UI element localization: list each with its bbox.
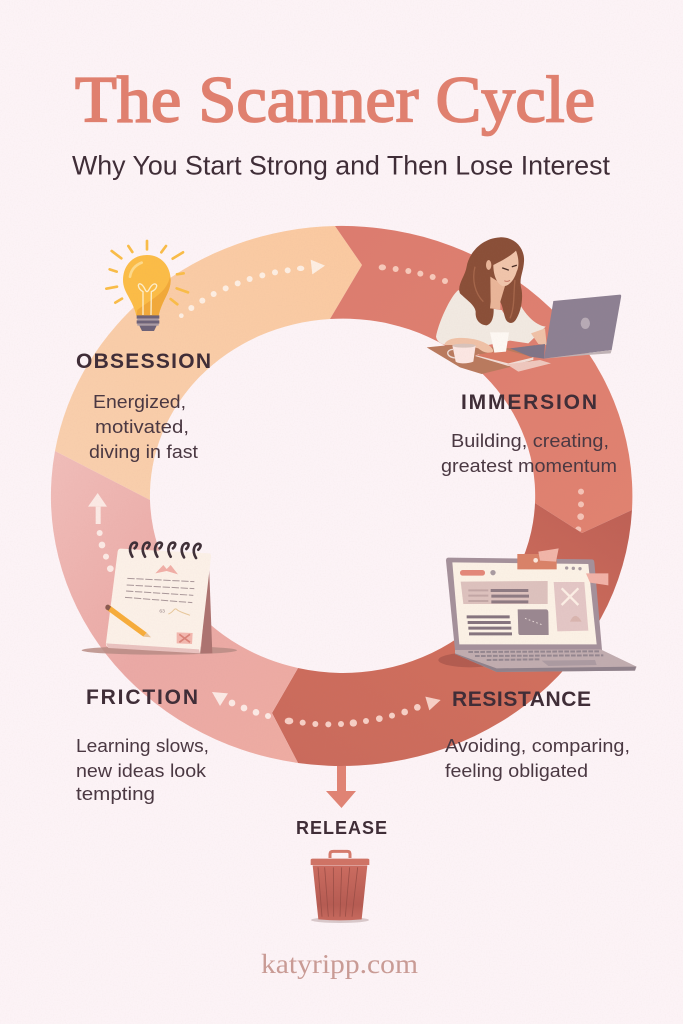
ring segment: friction [51, 451, 298, 763]
icon: desk calendar with pencil [82, 543, 237, 655]
calendar stand [201, 555, 212, 653]
description: obsession: Energized, [93, 391, 186, 412]
white cup [490, 332, 509, 353]
spiral rings [130, 543, 201, 558]
heading: obsession: OBSESSION [76, 350, 211, 373]
icon: woman working at laptop [427, 237, 551, 374]
calendar page [106, 549, 211, 653]
icon: light bulb [106, 241, 188, 331]
website credit: katyripp.com [261, 949, 418, 979]
dotted arrow: immersion to resistance [567, 489, 584, 557]
dotted arrow: obsession to immersion [179, 260, 325, 318]
description: friction [76, 735, 209, 804]
trash body [313, 865, 367, 920]
hair highlights [474, 267, 515, 318]
description: friction: new ideas look [76, 760, 207, 781]
subtitle: Why You Start Strong and Then Lose Interest [72, 150, 610, 180]
cross box [177, 632, 193, 644]
blouse [436, 290, 546, 345]
ear [486, 260, 491, 270]
description: immersion [441, 430, 617, 476]
laptop shadow [438, 653, 502, 667]
desk [427, 345, 535, 374]
description: friction: Learning slows, [76, 735, 209, 756]
dotted arrow: friction to obsession [88, 493, 114, 572]
arrow: down to release [326, 766, 356, 808]
heading: resistance: RESISTANCE [452, 688, 591, 711]
neck [490, 277, 505, 309]
panel: immersion stage [330, 226, 632, 557]
screen bezel [446, 558, 602, 650]
description: immersion: greatest momentum [441, 455, 617, 476]
panel: obsession stage [55, 226, 362, 500]
trash ribs [318, 867, 358, 917]
ring segment: obsession [55, 226, 362, 500]
trash shadow [311, 917, 369, 923]
bow [155, 565, 178, 574]
face [493, 251, 518, 286]
screen content [460, 570, 485, 576]
icon: trash can [311, 851, 369, 923]
dotted arrow: resistance to friction direction [285, 697, 441, 727]
pop-up notifications [517, 554, 557, 569]
panel: friction stage [51, 451, 298, 804]
description: obsession [89, 391, 198, 462]
pencil [106, 605, 147, 637]
facial features [503, 265, 516, 270]
hair [459, 237, 524, 325]
panel: resistance stage [272, 503, 637, 781]
dotted arrow: immersion top [379, 264, 448, 284]
description: friction: tempting [76, 783, 155, 804]
notebook [475, 350, 533, 363]
ring segment: resistance [272, 503, 632, 766]
dots right part and arrowhead [376, 697, 441, 722]
icon: desk calendar with pencil: 63 [159, 609, 165, 615]
scribble [168, 609, 190, 615]
description: obsession: motivated, [95, 416, 189, 437]
notebook page edge [475, 354, 533, 366]
forearm [444, 338, 493, 353]
heading: friction: FRICTION [86, 686, 198, 709]
dotted arrow: friction bottom [212, 692, 271, 719]
description: resistance: Avoiding, comparing, [445, 735, 630, 756]
right hand [531, 328, 547, 345]
dots left part [285, 718, 369, 727]
icon: closed-view laptop [510, 295, 621, 359]
description: resistance: feeling obligated [445, 760, 588, 781]
trash lid [311, 859, 369, 865]
pink cup [452, 345, 476, 363]
description: immersion: Building, creating, [451, 430, 609, 451]
handwritten lines [125, 578, 194, 603]
heading: release: RELEASE [296, 818, 387, 838]
description: obsession: diving in fast [89, 441, 198, 462]
title: The Scanner Cycle [75, 64, 595, 136]
icon: laptop with pop-ups [438, 548, 637, 672]
calendar shadow [82, 646, 237, 655]
heading: immersion: IMMERSION [461, 391, 597, 414]
trash handle [330, 851, 350, 858]
ring segment: immersion [330, 226, 632, 533]
description: resistance [445, 735, 630, 781]
paper sheet [507, 360, 551, 372]
laptop keyboard base [455, 649, 637, 672]
